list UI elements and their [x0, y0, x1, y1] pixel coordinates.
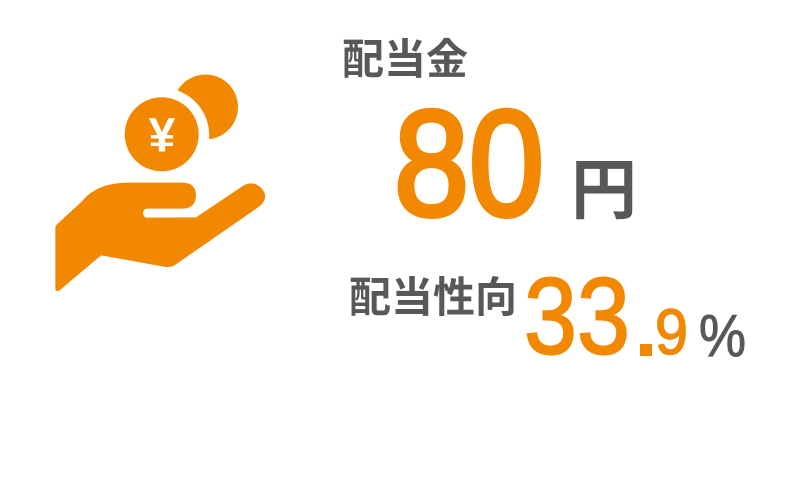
icon: front coin	[125, 97, 199, 171]
value: decimal point	[640, 344, 652, 356]
unit: yen: 円	[571, 153, 637, 227]
value: 33: 33	[524, 256, 630, 378]
icon: back coin	[178, 74, 238, 139]
unit: percent: %	[699, 303, 746, 369]
label: payout ratio: 配当性向	[349, 274, 517, 321]
heading: dividend: 配当金	[342, 36, 468, 83]
value: decimal 9: 9	[655, 296, 688, 368]
icon: open hand	[55, 183, 265, 291]
value: 80: 80	[394, 79, 544, 247]
icon: yen sign: ¥	[149, 110, 176, 162]
icon: hand holding yen coins	[55, 74, 265, 291]
